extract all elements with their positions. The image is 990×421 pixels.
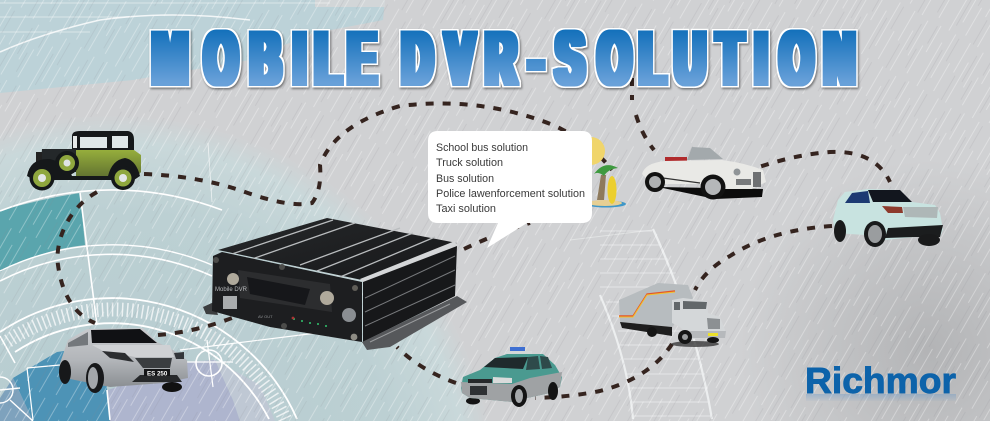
- callout: solution list: Taxi solution: [436, 203, 496, 215]
- title: MOBILE DVR-SOLUTION: MOBILE DVR-SOLUTION: [153, 15, 855, 101]
- background: radar arcs: [0, 3, 330, 421]
- dashed routes: [57, 78, 890, 398]
- logo: Richmor: Richmor: [805, 360, 956, 401]
- icon: white convertible: [642, 147, 766, 200]
- icon: vintage green car: [27, 131, 141, 190]
- background: coloured wedges: [0, 193, 275, 421]
- DVR front face: [212, 252, 362, 342]
- DVR front face: AV OUT: [258, 314, 273, 319]
- DVR top face: [218, 218, 457, 283]
- DVR front face: Mobile DVR: [215, 287, 248, 293]
- callout: solution list: Police lawenforcement solution: [436, 188, 585, 200]
- callout: solution list: School bus solution: [436, 142, 528, 154]
- icon: white SUV: [833, 189, 943, 247]
- icon: palm tree island: [577, 137, 626, 208]
- background: parking-stripe arcs: [570, 229, 712, 419]
- icon: left mounting flange: [203, 302, 218, 315]
- icon: silver sedan ES 250: ES 250: [147, 370, 168, 377]
- panel: DVR device: [203, 218, 467, 350]
- callout: solution list: Bus solution: [436, 173, 494, 185]
- DVR side face with fins: [362, 246, 467, 350]
- icon: green taxi: [461, 347, 562, 407]
- callout: solution list: [428, 131, 592, 248]
- callout: solution list: Truck solution: [436, 157, 503, 169]
- icon: semi truck: [619, 283, 726, 347]
- icon: silver sedan ES 250: [59, 328, 188, 393]
